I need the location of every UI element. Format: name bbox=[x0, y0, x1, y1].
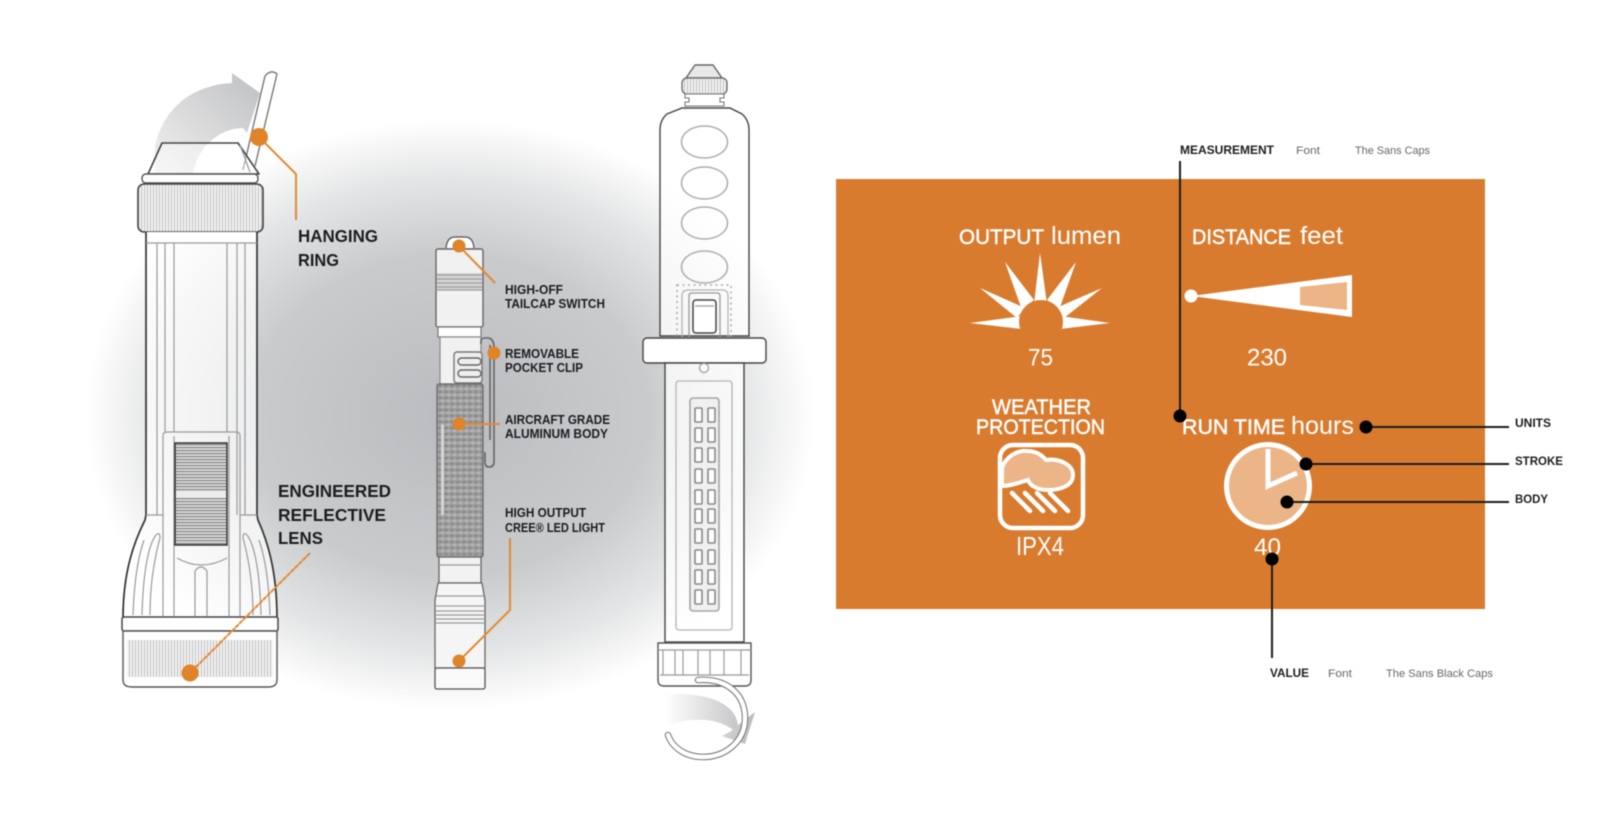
icon: rain cloud bbox=[1000, 445, 1083, 528]
callout: aircraft grade aluminum body bbox=[452, 413, 610, 441]
annotation: value font: Font bbox=[1328, 668, 1352, 680]
metric: distance feet: DISTANCE bbox=[1192, 226, 1291, 249]
metric: output lumen: OUTPUT bbox=[959, 226, 1044, 249]
icon: sun bbox=[970, 253, 1110, 344]
metric: distance feet: feet bbox=[1300, 222, 1343, 250]
hatched grip window bbox=[175, 443, 227, 545]
callout: removable pocket clip: POCKET CLIP bbox=[505, 361, 583, 375]
icon: beam bbox=[1184, 275, 1352, 317]
callout: hanging ring: HANGING bbox=[298, 226, 378, 246]
icon: clock bbox=[1226, 444, 1310, 528]
annotation: measurement font: Font bbox=[1296, 145, 1320, 157]
annotation: value font: The Sans Black Caps bbox=[1386, 668, 1493, 680]
metric: output lumen: 75 bbox=[1028, 344, 1053, 372]
lower barrel bbox=[435, 557, 485, 689]
flashlight head cap bbox=[148, 143, 259, 174]
LED array bbox=[690, 398, 719, 611]
callout: removable pocket clip bbox=[488, 346, 583, 375]
upper handle bbox=[660, 108, 749, 336]
metric: run time hours: 40 bbox=[1254, 534, 1281, 561]
upper barrel bbox=[436, 249, 483, 384]
pocket clip bbox=[454, 338, 494, 467]
metric: weather protection: WEATHER bbox=[992, 396, 1091, 419]
callout: aircraft grade aluminum body: ALUMINUM BODY bbox=[505, 427, 609, 441]
bottom lens ring bbox=[122, 617, 278, 687]
annotation: units bbox=[1360, 416, 1551, 434]
work light illustration bbox=[643, 65, 766, 757]
panel: orange icon key bbox=[836, 179, 1485, 609]
callout: high output LED light: CREE® LED LIGHT bbox=[505, 521, 605, 535]
metric: distance feet: 230 bbox=[1247, 344, 1287, 372]
knurled ring bbox=[138, 184, 263, 232]
slim pocket flashlight illustration bbox=[435, 237, 610, 689]
metric: weather protection: PROTECTION bbox=[976, 416, 1105, 439]
callout: high-off tailcap switch bbox=[452, 240, 605, 311]
callout: hanging ring bbox=[250, 128, 378, 270]
metric: run time hours: RUN TIME bbox=[1182, 416, 1285, 439]
metric: weather protection: IPX4 bbox=[1016, 531, 1064, 561]
annotation: measurement font: MEASUREMENT bbox=[1180, 143, 1275, 157]
callout: engineered reflective lens: ENGINEERED bbox=[278, 481, 391, 501]
callout: high-off tailcap switch: HIGH-OFF bbox=[505, 283, 563, 297]
callout: high output LED light: HIGH OUTPUT bbox=[505, 506, 586, 520]
top cap bbox=[682, 65, 727, 106]
callout: engineered reflective lens: LENS bbox=[278, 528, 323, 548]
annotation: stroke bbox=[1300, 454, 1563, 470]
annotation: measurement font: The Sans Caps bbox=[1355, 145, 1430, 157]
annotation: body: BODY bbox=[1515, 492, 1548, 506]
annotation: body bbox=[1280, 492, 1548, 508]
icon: rotation arrow above hanging ring bbox=[155, 73, 260, 173]
metric: output lumen: lumen bbox=[1051, 222, 1121, 250]
annotation: value font bbox=[1266, 552, 1493, 680]
callout: high-off tailcap switch: TAILCAP SWITCH bbox=[505, 297, 605, 311]
switch panel bbox=[677, 285, 731, 339]
hanging ring bbox=[243, 72, 277, 170]
grip ovals bbox=[682, 126, 728, 283]
collar band bbox=[142, 174, 258, 183]
metric: run time hours bbox=[1182, 412, 1354, 561]
hook bbox=[668, 680, 745, 757]
lower handle bbox=[665, 363, 744, 642]
callout: high output LED light bbox=[452, 506, 605, 668]
callout: hanging ring: RING bbox=[298, 250, 339, 270]
metric: run time hours: hours bbox=[1291, 412, 1354, 440]
metric: weather protection bbox=[976, 396, 1105, 561]
gray radial background glow bbox=[60, 110, 840, 720]
annotation: stroke: STROKE bbox=[1515, 454, 1563, 468]
orange background bbox=[836, 179, 1485, 609]
base collar bbox=[658, 643, 751, 686]
center flange bbox=[643, 338, 766, 363]
callout: removable pocket clip: REMOVABLE bbox=[505, 347, 579, 361]
annotation: value font: VALUE bbox=[1270, 666, 1309, 680]
annotation: measurement font bbox=[1174, 143, 1430, 422]
metric: distance feet bbox=[1184, 222, 1352, 372]
callout: engineered reflective lens: REFLECTIVE bbox=[278, 505, 386, 525]
annotation: units: UNITS bbox=[1515, 416, 1551, 430]
callout: engineered reflective lens bbox=[182, 481, 391, 682]
metric: output lumen bbox=[959, 222, 1121, 372]
callout: aircraft grade aluminum body: AIRCRAFT GRADE bbox=[505, 413, 610, 427]
knurled aluminum body bbox=[437, 384, 483, 557]
large flashlight illustration bbox=[122, 72, 391, 687]
icon: hook rotation arrow bbox=[665, 694, 755, 744]
tailcap button bbox=[446, 237, 474, 248]
flashlight barrel bbox=[123, 232, 277, 618]
